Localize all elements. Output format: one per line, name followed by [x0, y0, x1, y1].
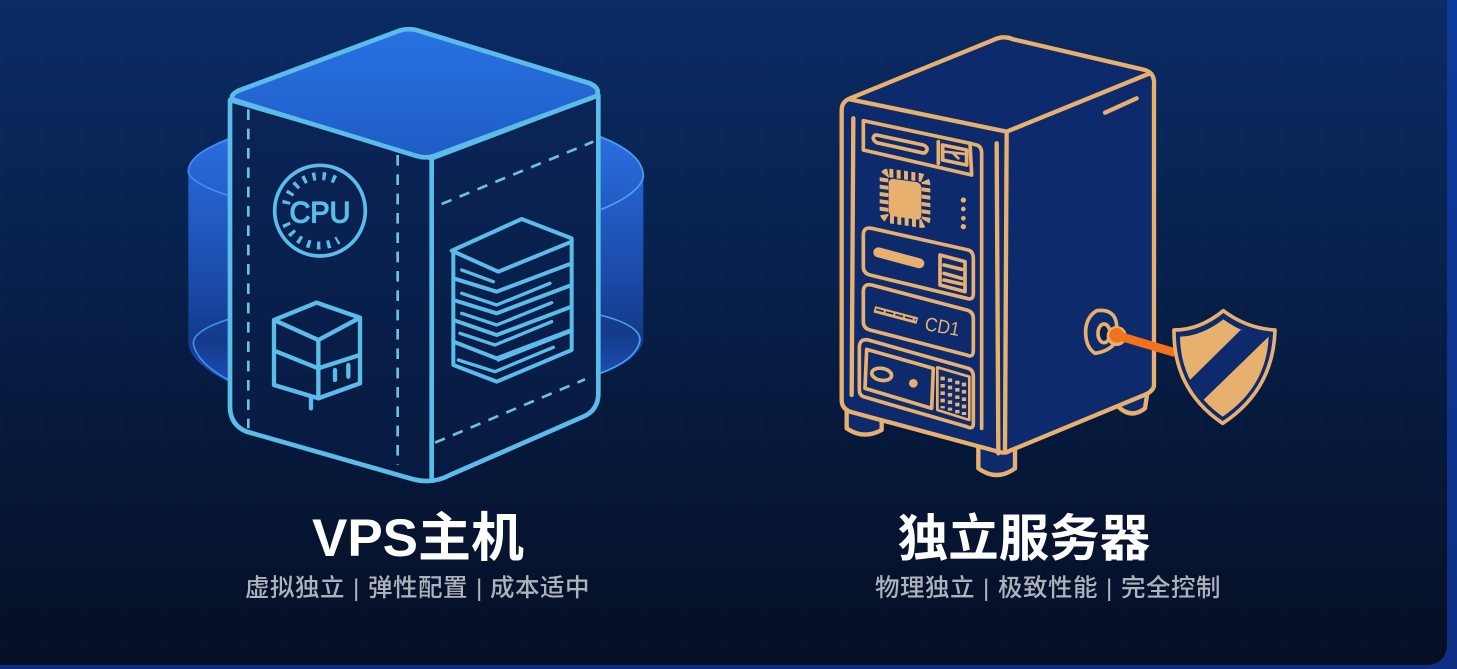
drive bay 3 — [863, 285, 973, 356]
illustration: VPS host cube — [188, 29, 643, 481]
icon: storage stack — [452, 219, 572, 382]
icon: CPU dial — [275, 165, 365, 256]
subtitle: VPS features: | — [353, 575, 360, 602]
subtitle: VPS features: 弹性配置 — [368, 574, 468, 602]
status lights — [961, 197, 966, 229]
cube body — [230, 95, 598, 481]
CPU label: CPU — [290, 197, 350, 230]
subtitle: dedicated server features: 极致性能 — [998, 574, 1098, 602]
ring: virtualization band — [188, 135, 643, 383]
icon: small cube — [274, 303, 360, 408]
subtitle: dedicated server features: | — [983, 575, 990, 602]
port and orange cable — [1086, 310, 1175, 353]
subtitle: dedicated server features: | — [1106, 575, 1113, 602]
server body — [842, 37, 1154, 453]
subtitle: dedicated server features: 物理独立 — [875, 574, 975, 602]
heading: VPS主机: VPS主机 — [312, 509, 524, 568]
subtitle: VPS features: 成本适中 — [490, 574, 590, 602]
illustration: dedicated server tower — [842, 37, 1275, 475]
subtitle: VPS features: | — [476, 575, 483, 602]
drive bay 2 — [863, 228, 973, 299]
icon: shield — [1174, 311, 1275, 423]
drive bay 1 — [863, 121, 982, 428]
drive bay 4 — [859, 340, 973, 428]
subtitle: VPS features: 虚拟独立 — [245, 574, 345, 602]
CD1 label: CD1 — [923, 314, 961, 341]
cube top face — [232, 29, 598, 157]
icon: CPU chip — [884, 172, 926, 224]
subtitle: dedicated server features: 完全控制 — [1121, 574, 1221, 602]
server feet — [847, 387, 1148, 475]
heading: 独立服务器: 独立服务器 — [898, 510, 1150, 567]
